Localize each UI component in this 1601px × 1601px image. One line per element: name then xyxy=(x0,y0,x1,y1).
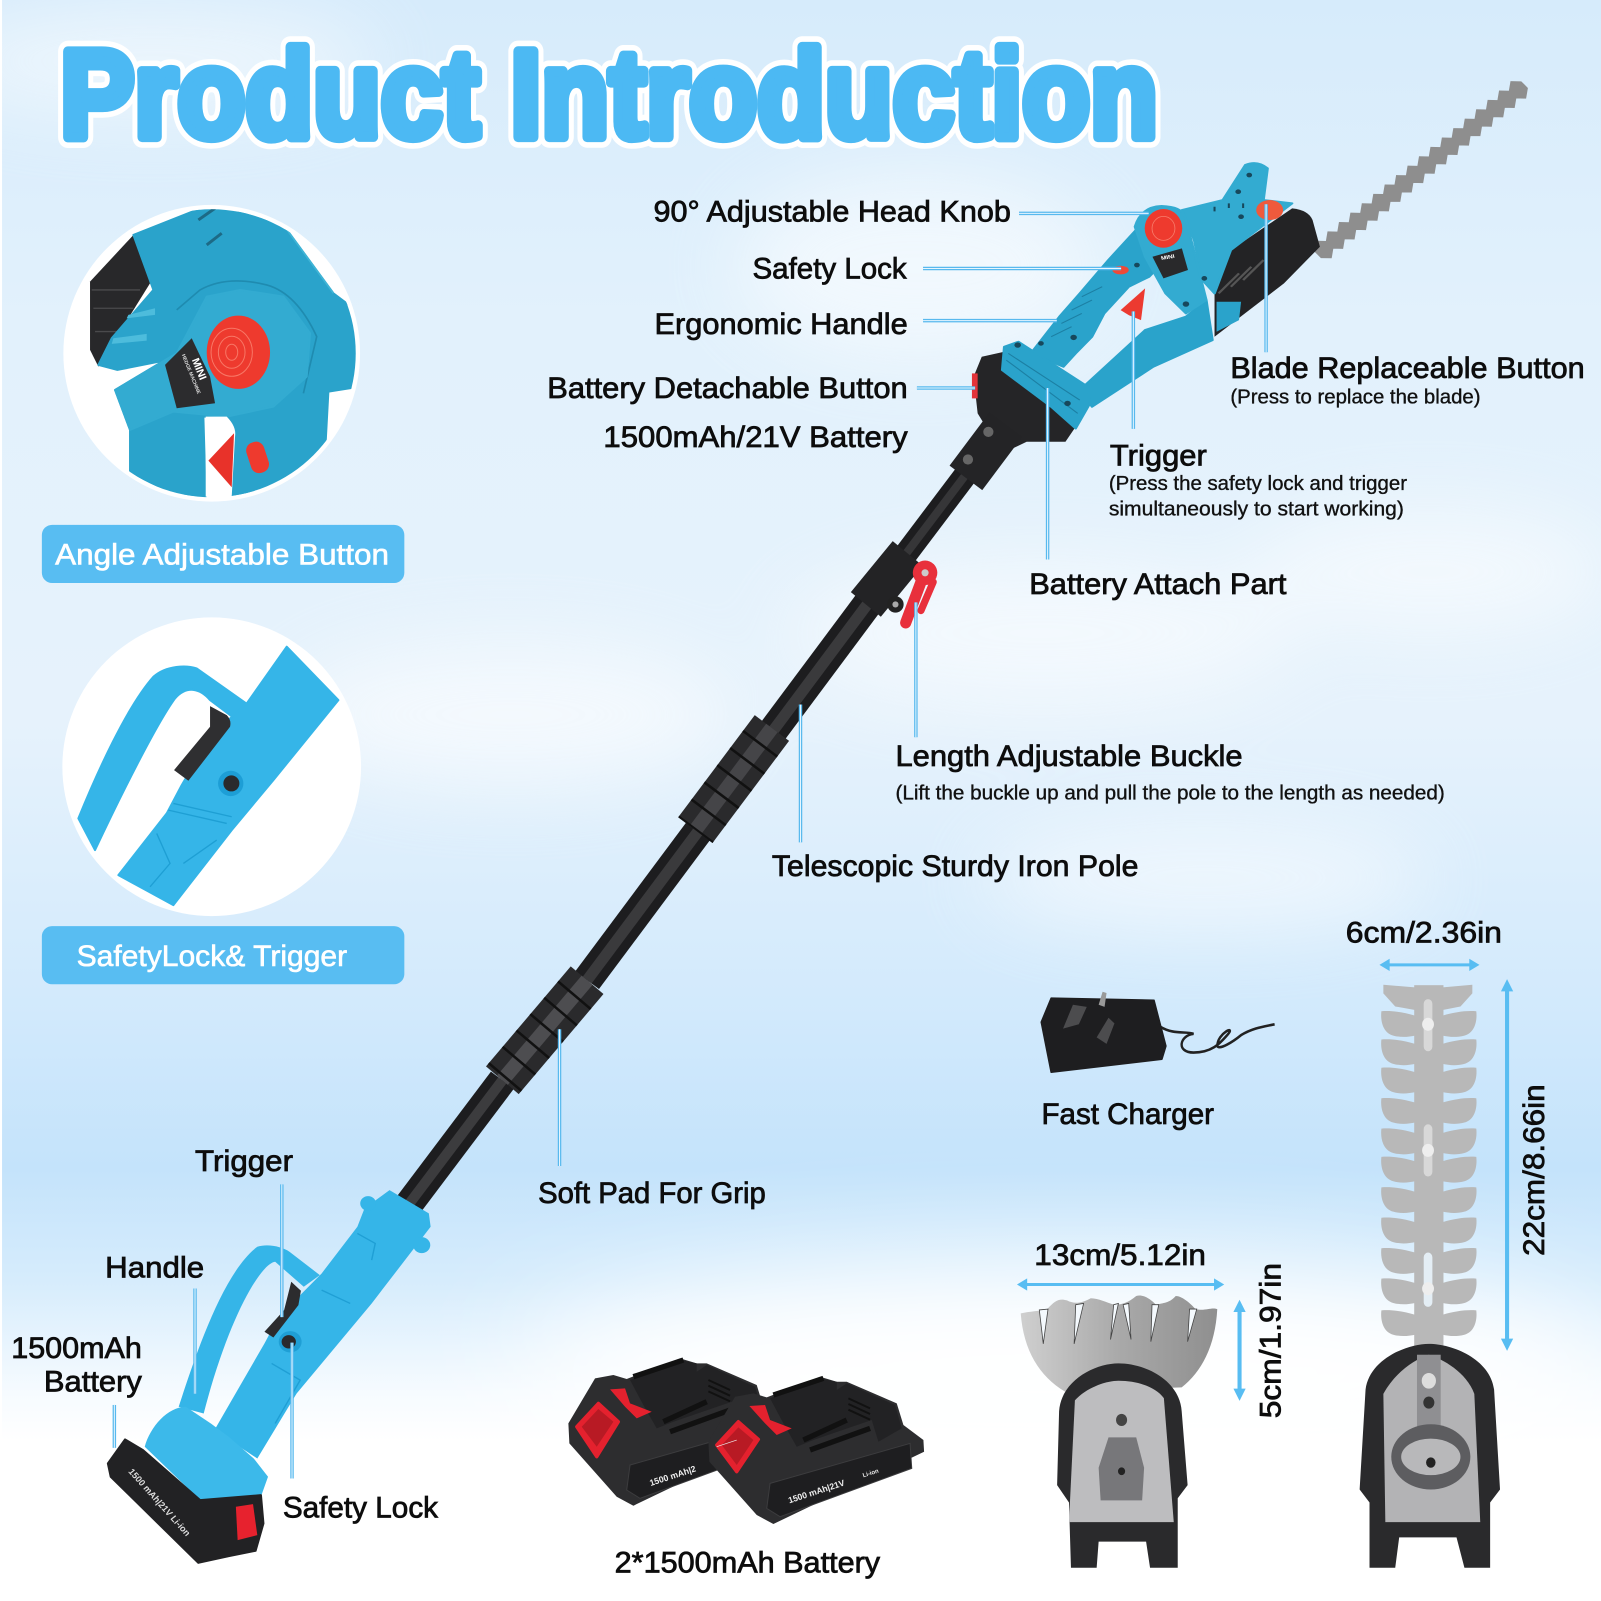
handle body xyxy=(214,1190,431,1458)
callout: handle: Handle xyxy=(105,1251,204,1284)
callout: trigger: (Press the safety lock and trigger xyxy=(1109,473,1407,495)
dimension: 13cm width xyxy=(1017,1239,1224,1291)
knob plate xyxy=(1135,206,1206,313)
label pill: Angle Adjustable Button xyxy=(42,525,404,583)
pole joint xyxy=(963,425,1006,478)
collar band xyxy=(1002,342,1090,428)
callout: 1500mAh battery: 1500mAh xyxy=(11,1332,142,1365)
trigger xyxy=(264,1282,301,1337)
detail circle: head knob close-up xyxy=(63,203,360,502)
battery detach button xyxy=(972,373,978,398)
lower arm xyxy=(1080,300,1212,407)
battery xyxy=(108,1439,263,1563)
callout: safety lock: Safety Lock xyxy=(753,253,907,286)
callout: trigger: Trigger xyxy=(1110,440,1207,473)
mini badge: MINI xyxy=(1161,254,1176,262)
panel: angle adjustable button xyxy=(42,203,404,583)
upper blue body xyxy=(1182,163,1292,293)
title: Product Introduction xyxy=(60,25,1158,164)
callout: battery attach part: Battery Attach Part xyxy=(1029,568,1287,601)
callout: length adjustable buckle: (Lift the buckle up and pull the pole to the length as needed) xyxy=(895,782,1445,804)
black rear head xyxy=(974,352,1076,453)
black guard xyxy=(1215,208,1320,337)
soft grip lower xyxy=(502,980,587,1080)
callout: blade replaceable button: (Press to replace the blade) xyxy=(1230,386,1481,408)
panel: safety lock and trigger xyxy=(42,617,404,984)
battery 1 xyxy=(568,1358,784,1506)
callout: 1500mAh battery xyxy=(11,1332,142,1448)
battery 2: Li-ion xyxy=(862,1468,880,1479)
callout: soft pad for grip: Soft Pad For Grip xyxy=(538,1177,766,1210)
detail circle: trigger close-up xyxy=(62,617,361,916)
trigger xyxy=(1121,288,1145,320)
main tool head xyxy=(972,82,1527,453)
battery 2: 1500 mAh|21V xyxy=(787,1478,846,1505)
dimension: 6cm width: 6cm/2.36in xyxy=(1346,916,1502,949)
short blade xyxy=(1021,1295,1217,1392)
bottom handle and battery xyxy=(108,1190,431,1563)
blade xyxy=(1315,82,1527,258)
detail circle: head knob close-up: MINI xyxy=(189,357,208,382)
title: Product Introduction xyxy=(60,25,1158,164)
dimension: 22cm length xyxy=(1501,979,1551,1351)
blade release button xyxy=(1256,200,1283,220)
callout: 90 adjustable head knob: 90° Adjustable Head Knob xyxy=(653,196,1011,229)
grip xyxy=(1031,227,1166,367)
long blade guard xyxy=(1360,1344,1500,1568)
dimension: 6cm width xyxy=(1346,916,1502,971)
callout: length adjustable buckle xyxy=(895,602,1445,804)
detail circle: head knob close-up: HEDGE MACHINE xyxy=(180,353,202,396)
soft grip upper xyxy=(695,728,772,830)
battery base xyxy=(145,1407,268,1500)
label: 1500mAh/21V battery: 1500mAh/21V Battery xyxy=(603,421,908,454)
rear handle hoop xyxy=(179,1245,320,1413)
safety button xyxy=(279,1331,302,1352)
dimension: 5cm height xyxy=(1233,1263,1287,1418)
long blade xyxy=(1381,985,1477,1355)
battery 1: 1500 mAh|2 xyxy=(648,1463,697,1488)
charger, blades xyxy=(1021,985,1500,1568)
label pill: Angle Adjustable Button: Angle Adjustable Button xyxy=(55,539,389,572)
callout: blade replaceable button: Blade Replaceable Button xyxy=(1230,352,1585,385)
battery 2 xyxy=(708,1377,924,1524)
dimension: 22cm length: 22cm/8.66in xyxy=(1518,1084,1551,1256)
label pill: SafetyLock & Trigger xyxy=(42,926,404,984)
callout: battery detachable button: Battery Detachable Button xyxy=(547,372,908,405)
label: fast charger: Fast Charger xyxy=(1041,1098,1214,1131)
short blade guard xyxy=(1057,1363,1188,1568)
red knob xyxy=(1145,209,1182,248)
callout: length adjustable buckle: Length Adjustable Buckle xyxy=(895,740,1243,773)
label pill: SafetyLock & Trigger: SafetyLock& Trigger xyxy=(77,940,347,973)
callout: lower trigger: Trigger xyxy=(195,1145,293,1178)
telescopic pole xyxy=(408,476,965,1205)
callout: lower safety lock: Safety Lock xyxy=(283,1491,438,1524)
callout: telescopic sturdy iron pole: Telescopic Sturdy Iron Pole xyxy=(772,850,1138,883)
telescopic collar and red buckle xyxy=(866,553,937,623)
callout: trigger xyxy=(1109,311,1407,521)
dimension: 5cm height: 5cm/1.97in xyxy=(1254,1263,1287,1418)
label: 2*1500mAh battery: 2*1500mAh Battery xyxy=(615,1546,880,1579)
fast charger xyxy=(1041,992,1275,1072)
callout: trigger: simultaneously to start working) xyxy=(1109,499,1404,521)
battery: 1500 mAh|21V Li-ion xyxy=(126,1467,193,1538)
dots xyxy=(1014,173,1252,406)
callout: blade replaceable button xyxy=(1230,204,1585,408)
safety lock button xyxy=(1112,266,1129,274)
batteries pack xyxy=(568,1358,924,1524)
mini badge xyxy=(1152,248,1188,278)
dimension: 13cm width: 13cm/5.12in xyxy=(1034,1239,1206,1272)
callout: ergonomic handle: Ergonomic Handle xyxy=(654,308,908,341)
callout: 1500mAh battery: Battery xyxy=(44,1366,142,1399)
